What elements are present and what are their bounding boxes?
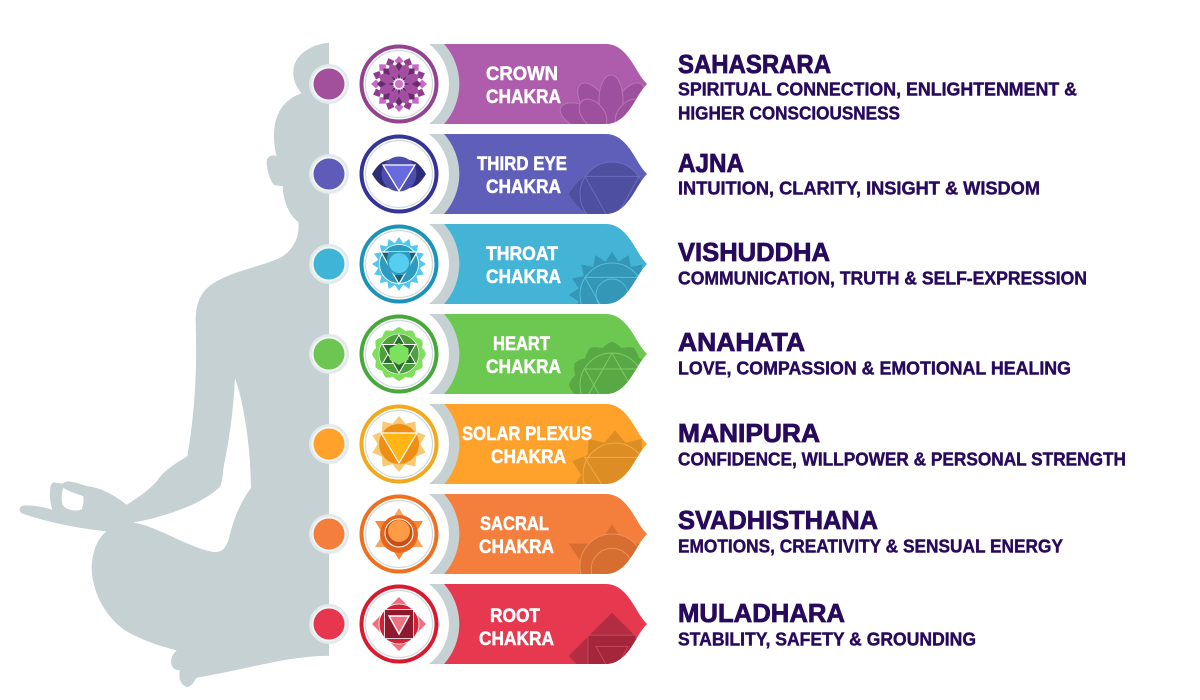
description: Vishuddha (678, 237, 1087, 288)
row: throat chakra (309, 224, 647, 304)
spine dot: crown (309, 64, 349, 104)
crescent: root (429, 584, 459, 664)
spine dot: solar plexus (309, 424, 349, 464)
description: Sahasrara: SAHASRARA (678, 49, 831, 79)
medallion: heart (362, 316, 436, 392)
watermark: sacral (569, 524, 640, 574)
crescent: third eye (429, 134, 459, 214)
banner: solar plexus (444, 404, 647, 484)
label: third eye chakra: CHAKRA (486, 177, 561, 198)
watermark: third eye (569, 162, 643, 214)
description: Manipura: MANIPURA (678, 418, 820, 448)
crescent: solar plexus (429, 404, 459, 484)
spine dot: sacral (309, 514, 349, 554)
label: root chakra: ROOT (490, 606, 540, 627)
row: heart chakra (309, 314, 647, 394)
description: Ajna: INTUITION, CLARITY, INSIGHT & WISDOM (678, 178, 1040, 198)
crescent: crown (429, 44, 459, 124)
label: throat chakra: THROAT (486, 244, 558, 265)
description: Manipura (678, 418, 1126, 470)
description: Anahata: LOVE, COMPASSION & EMOTIONAL HEALING (678, 358, 1071, 378)
description: Anahata: ANAHATA (678, 327, 805, 357)
description: Muladhara: STABILITY, SAFETY & GROUNDING (678, 630, 976, 650)
crescent: throat (429, 224, 459, 304)
description: Ajna (678, 148, 1040, 198)
label: third eye chakra: THIRD EYE (477, 154, 567, 175)
description: Anahata (678, 327, 1071, 378)
label: root chakra: CHAKRA (479, 629, 554, 650)
description: Muladhara: MULADHARA (678, 598, 845, 628)
description: Manipura: CONFIDENCE, WILLPOWER & PERSONAL STRENGTH (678, 450, 1126, 470)
banner: throat (444, 224, 647, 304)
label: sacral chakra: CHAKRA (479, 537, 554, 558)
watermark: root (569, 613, 637, 664)
banner: heart (444, 314, 647, 394)
label: sacral chakra: SACRAL (480, 514, 549, 535)
row: crown chakra (309, 44, 647, 124)
description: Muladhara (678, 598, 976, 650)
spine dot: heart (309, 334, 349, 374)
crescent: heart (429, 314, 459, 394)
label: heart chakra: HEART (493, 334, 550, 355)
medallion: root (362, 586, 436, 662)
watermark: heart (569, 342, 642, 394)
medallion: crown (362, 46, 436, 122)
watermark: solar plexus (572, 430, 642, 484)
banner: sacral (444, 494, 647, 574)
medallion: sacral (362, 496, 436, 572)
watermark: throat (569, 252, 642, 304)
label: heart chakra: CHAKRA (486, 357, 561, 378)
watermark: lotus (560, 74, 644, 124)
description: Svadhisthana (678, 505, 1063, 556)
label: solar plexus chakra: CHAKRA (491, 447, 566, 468)
crescent: sacral (429, 494, 459, 574)
medallion: third eye (362, 136, 436, 212)
medallion: throat (362, 226, 436, 302)
spine dot: root (309, 604, 349, 644)
silhouette: seated meditating figure (20, 43, 329, 687)
description: Vishuddha: COMMUNICATION, TRUTH & SELF-EXPRESSION (678, 268, 1087, 288)
description: Sahasrara: HIGHER CONSCIOUSNESS (678, 104, 900, 124)
label: crown chakra: CROWN (486, 64, 558, 85)
banner: crown (444, 44, 647, 124)
medallion: solar plexus (362, 406, 436, 482)
spine dot: third eye (309, 154, 349, 194)
spine dot: throat (309, 244, 349, 284)
label: throat chakra: CHAKRA (486, 267, 561, 288)
row: third eye chakra (309, 134, 647, 214)
description: Svadhisthana: EMOTIONS, CREATIVITY & SENSUAL ENERGY (678, 536, 1063, 556)
description: Vishuddha: VISHUDDHA (678, 237, 830, 267)
banner: third eye (444, 134, 647, 214)
label: crown chakra: CHAKRA (486, 87, 561, 108)
row: sacral chakra (309, 494, 647, 574)
description: Svadhisthana: SVADHISTHANA (678, 505, 878, 535)
row: root chakra (309, 584, 647, 664)
description: Ajna: AJNA (678, 148, 744, 178)
label: solar plexus chakra: SOLAR PLEXUS (462, 424, 592, 445)
banner: root (444, 584, 647, 664)
row: solar plexus chakra (309, 404, 647, 484)
description: Sahasrara (678, 49, 1077, 124)
description: Sahasrara: SPIRITUAL CONNECTION, ENLIGHTENMENT & (678, 80, 1077, 100)
